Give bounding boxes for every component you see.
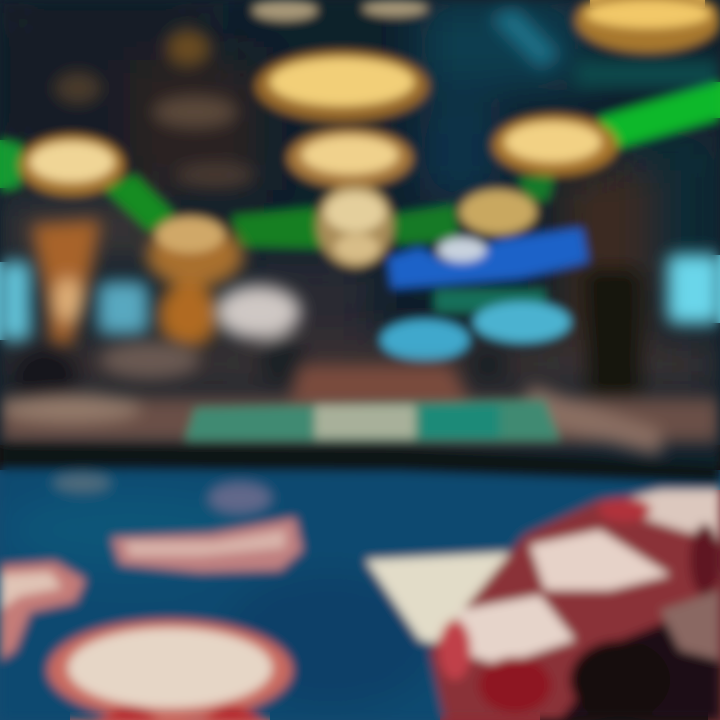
table rail [0,365,720,455]
figures and white glow [13,270,640,408]
chip: bottom centre [48,620,292,720]
distant brown lamps [54,30,255,187]
chip stack: bottom right [430,490,720,720]
green felt strip [185,400,560,440]
chip: centre left [112,518,302,572]
lamp: top right [576,0,720,52]
lamp: small right [460,190,536,234]
orange lamp columns [32,220,243,347]
white card [366,552,545,650]
lamp: middle centre [288,129,412,187]
lamp: top stubs [253,0,427,20]
dark table edge [0,442,720,484]
lamp: tan left [156,217,224,253]
blue and cyan screens [0,228,720,360]
green light bands [0,82,720,248]
hanging gold lamps [20,0,720,267]
chip: far left [0,562,85,660]
table shading [0,490,440,710]
lamp: top centre [256,51,428,121]
teal ceiling accent [490,8,720,88]
lamp: right [493,115,617,175]
lamp: lower centre [317,183,393,267]
faint chips on table [52,473,272,514]
blue table surface [0,470,720,720]
lamp: left [20,135,124,195]
